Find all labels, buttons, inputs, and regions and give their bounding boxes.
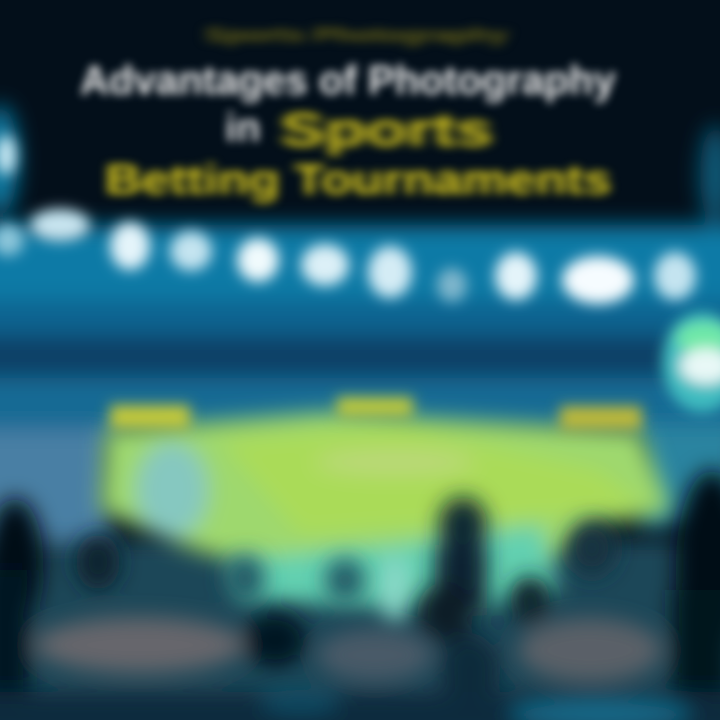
title line 1: Advantages of Photography [80,57,616,103]
eyebrow heading: Sports Photography [205,24,508,47]
crowd silhouettes [0,470,720,720]
title block [76,22,621,210]
title line 2 white: in [225,106,261,150]
icon: glowing scoreboard [662,312,720,412]
title line 2 yellow: Sports [280,104,493,157]
pitch [100,412,672,625]
title line 3 yellow: Betting Tournaments [105,156,611,204]
icon: floodlight row [0,135,696,304]
advertising boards [110,397,642,430]
